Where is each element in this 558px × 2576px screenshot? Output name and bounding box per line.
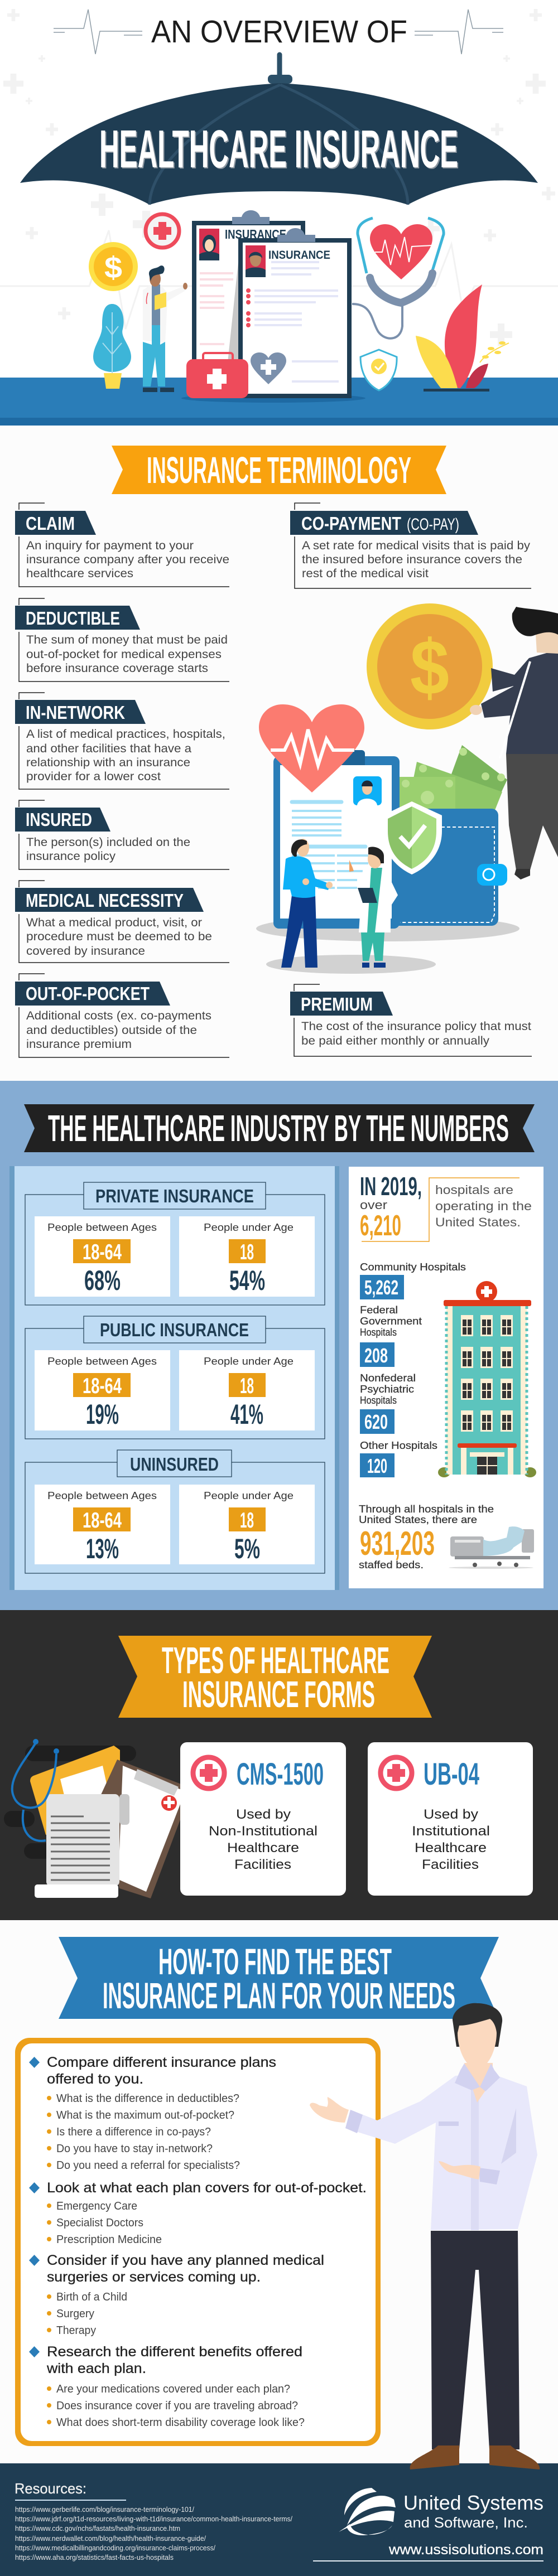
card: ub-04: UB-04 <box>424 1756 479 1791</box>
stat: nonfederal psychiatric hospitals <box>360 1372 416 1434</box>
group: public insurance: People under Age <box>204 1356 294 1367</box>
tip: compare plans: Is there a difference in co-pays? <box>56 2126 211 2138</box>
icon: coral heart <box>259 704 364 792</box>
shirt <box>345 2074 537 2230</box>
group: private insurance: PRIVATE INSURANCE <box>95 1186 254 1206</box>
stat: hospitals operating in 2019: United States. <box>435 1215 521 1229</box>
clipboard: front form <box>240 228 349 396</box>
group: uninsured: UNINSURED <box>130 1454 219 1475</box>
section: footer <box>0 2463 558 2576</box>
group: uninsured: 13% <box>86 1533 119 1564</box>
term: medical necessity: What a medical product, visit, or <box>26 916 202 929</box>
group: public insurance: 18-64 <box>83 1374 122 1398</box>
resources list: https://www.gerberlife.com/blog/insurance-terminology-101/ <box>15 2505 194 2514</box>
trousers <box>431 2231 519 2449</box>
stat: staffed beds: 931,203 <box>360 1525 435 1562</box>
stat: community hospitals: 5,262 <box>364 1276 398 1299</box>
group: private insurance: 68% <box>84 1265 121 1296</box>
term: premium: The cost of the insurance policy that must <box>301 1020 531 1033</box>
section: types of healthcare insurance forms <box>0 1610 558 1920</box>
term: medical necessity: procedure must be deemed to be <box>26 930 212 943</box>
icon: medical cross badge <box>146 214 179 248</box>
card: cms-1500: Non-Institutional <box>209 1824 318 1839</box>
term: out-of-pocket <box>15 974 229 1057</box>
stat: hospitals operating in 2019: IN 2019, <box>360 1172 422 1201</box>
ground band <box>0 378 558 426</box>
group: public insurance: People between Ages <box>47 1356 157 1367</box>
section: insurance terminology <box>15 446 558 1057</box>
card: cms-1500 <box>180 1742 346 1896</box>
tip: planned services: Therapy <box>56 2324 96 2337</box>
panel: insurance coverage <box>9 1166 339 1590</box>
section: header <box>0 0 558 427</box>
card: cms-1500: Healthcare <box>227 1840 299 1855</box>
tip: planned services: surgeries or services coming up. <box>47 2269 261 2285</box>
term: premium: PREMIUM <box>301 994 373 1014</box>
decorative heartbeat left <box>54 9 142 54</box>
stat: federal government hospitals: Government <box>360 1316 422 1327</box>
term: co-payment: the insured before insurance covers the <box>302 553 522 566</box>
group: uninsured <box>25 1450 325 1573</box>
tip: planned services: Consider if you have any planned medical <box>47 2253 324 2268</box>
website url: www.ussisolutions.com <box>388 2542 543 2558</box>
term: insured: INSURED <box>26 809 92 830</box>
stat: community hospitals: Community Hospitals <box>360 1262 466 1273</box>
tip: out-of-pocket coverage <box>29 2180 367 2246</box>
stat: nonfederal psychiatric hospitals: Hospitals <box>360 1395 397 1406</box>
group: private insurance <box>25 1182 325 1305</box>
group: public insurance: 19% <box>86 1399 119 1430</box>
panel: checklist <box>15 2038 381 2446</box>
term: co-payment: CO-PAYMENT <box>301 513 401 534</box>
term: medical necessity <box>15 881 229 963</box>
presenter figure <box>310 2003 540 2469</box>
stat: staffed beds: Through all hospitals in the <box>359 1504 494 1515</box>
card: cms-1500: Facilities <box>234 1857 291 1872</box>
tip: planned services: Surgery <box>56 2308 94 2320</box>
tip: research benefits <box>29 2344 305 2429</box>
term: in-network: A list of medical practices, hospitals, <box>26 728 225 741</box>
term: claim: CLAIM <box>26 513 75 534</box>
term: deductible: before insurance coverage starts <box>26 662 208 675</box>
stat: nonfederal psychiatric hospitals: Nonfederal <box>360 1372 416 1384</box>
stat: staffed beds: United States, there are <box>359 1514 477 1525</box>
stat: hospitals operating in 2019: hospitals are <box>435 1183 513 1197</box>
group: public insurance <box>25 1316 325 1439</box>
icon: green shield <box>383 801 442 874</box>
stat: nonfederal psychiatric hospitals: Psychiatric <box>360 1384 414 1395</box>
term: insured: The person(s) included on the <box>26 836 190 849</box>
tip: research benefits: with each plan. <box>46 2361 146 2376</box>
stat: nonfederal psychiatric hospitals: 620 <box>364 1410 388 1433</box>
icon: red and yellow plant <box>416 284 509 392</box>
tip: out-of-pocket coverage: Look at what each plan covers for out-of-pocket. <box>47 2180 367 2196</box>
card: ub-04 <box>368 1742 533 1896</box>
tip: planned services: Birth of a Child <box>56 2291 127 2303</box>
section: how to find the best insurance plan <box>15 1937 499 2446</box>
big dollar coin: $ <box>410 624 449 711</box>
patient figure <box>281 839 333 968</box>
logo: united systems and software <box>339 2488 543 2535</box>
logo: united systems and software: United Systems <box>403 2491 543 2514</box>
heading banner <box>118 1636 432 1718</box>
resources list <box>15 2480 292 2561</box>
stat: staffed beds <box>359 1504 494 1570</box>
card: ub-04: Healthcare <box>415 1840 487 1855</box>
tip: research benefits: Does insurance cover if you are traveling abroad? <box>56 2400 298 2412</box>
tip: compare plans: offered to you. <box>47 2071 143 2087</box>
wallet <box>391 809 507 926</box>
term: out-of-pocket: OUT-OF-POCKET <box>26 983 150 1004</box>
tip: out-of-pocket coverage: Emergency Care <box>56 2200 137 2212</box>
term: claim: insurance company after you receive <box>26 553 229 566</box>
money bills <box>400 745 507 820</box>
group: private insurance: People under Age <box>204 1222 294 1233</box>
icon: dollar coin: $ <box>104 251 122 284</box>
stat: other hospitals: Other Hospitals <box>360 1440 437 1451</box>
resources list: https://www.cdc.gov/nchs/fastats/health-insurance.htm <box>15 2524 180 2532</box>
tip: compare plans: Do you have to stay in-network? <box>56 2143 213 2155</box>
neck and collar <box>455 2063 500 2103</box>
stat: federal government hospitals: Hospitals <box>360 1327 397 1338</box>
illustration: medical paperwork <box>4 1739 190 1898</box>
tip: research benefits: Are your medications covered under each plan? <box>56 2383 290 2395</box>
logo: united systems and software: and Software, Inc. <box>404 2514 528 2531</box>
clipboard: back form: INSURANCE <box>225 227 286 241</box>
term: out-of-pocket: Additional costs (ex. co-payments <box>26 1009 211 1022</box>
icon: blue plant <box>93 304 131 389</box>
umbrella <box>20 55 538 205</box>
icon: red heart <box>370 224 432 279</box>
title: an overview of: AN OVERVIEW OF <box>151 14 407 50</box>
group: public insurance: 41% <box>230 1399 263 1430</box>
card: ub-04: Facilities <box>422 1857 479 1872</box>
resources list: https://www.jdrf.org/t1d-resources/living-with-t1d/insurance/common-health-insurance-terms/ <box>15 2515 292 2523</box>
stethoscope <box>352 218 444 339</box>
tip: planned services <box>29 2253 324 2337</box>
group: uninsured: People under Age <box>204 1490 294 1501</box>
term: co-payment: rest of the medical visit <box>302 567 429 580</box>
term: out-of-pocket: and deductibles) outside of the <box>26 1024 197 1037</box>
term: deductible: out-of-pocket for medical expenses <box>26 648 222 661</box>
icon: first aid kit <box>186 353 248 398</box>
group: public insurance: 18 <box>240 1374 254 1398</box>
doctor figure <box>349 847 398 968</box>
term: claim <box>15 503 229 587</box>
hands <box>310 2097 480 2179</box>
clipboard document <box>273 750 400 929</box>
term: claim: healthcare services <box>26 567 133 580</box>
icon: shield <box>360 350 397 390</box>
shirt details <box>345 2080 516 2230</box>
stat: federal government hospitals: 208 <box>364 1344 388 1367</box>
stat: federal government hospitals: Federal <box>360 1304 398 1316</box>
tip: research benefits: What does short-term disability coverage look like? <box>56 2416 305 2429</box>
term: deductible <box>15 598 229 682</box>
group: uninsured: 18-64 <box>83 1509 122 1533</box>
icon: dollar coin <box>89 242 138 291</box>
term: medical necessity: covered by insurance <box>26 945 145 958</box>
stat: hospitals operating in 2019: over <box>360 1198 387 1212</box>
heading banner <box>59 1937 499 2019</box>
card: ub-04: Used by <box>424 1807 478 1822</box>
doctor figure <box>143 265 187 392</box>
term: medical necessity: MEDICAL NECESSITY <box>26 890 184 911</box>
heading banner: INSURANCE FORMS <box>182 1674 375 1715</box>
decorative heartbeat right <box>415 9 503 54</box>
stat: hospitals operating in 2019 <box>360 1172 532 1242</box>
term: in-network <box>15 693 229 789</box>
group: public insurance: PUBLIC INSURANCE <box>100 1320 249 1340</box>
term: premium <box>290 984 532 1056</box>
big dollar coin <box>367 603 493 729</box>
businessman <box>470 607 558 879</box>
clipboard: back form <box>194 210 303 363</box>
group: uninsured: 5% <box>234 1533 260 1564</box>
term: premium: be paid either monthly or annually <box>301 1035 490 1047</box>
term: co-payment: A set rate for medical visits that is paid by <box>302 539 531 552</box>
group: private insurance: People between Ages <box>47 1222 157 1233</box>
tip: out-of-pocket coverage: Specialist Doctors <box>56 2217 143 2229</box>
stat: hospitals operating in 2019: 6,210 <box>360 1210 401 1242</box>
term: co-payment: (CO-PAY) <box>407 515 459 534</box>
card: cms-1500: Used by <box>236 1807 291 1822</box>
stat: staffed beds: staffed beds. <box>359 1559 424 1570</box>
head <box>453 2003 502 2068</box>
group: uninsured: 18 <box>240 1509 254 1533</box>
stat: hospitals operating in 2019: operating in the <box>435 1199 532 1213</box>
resources list: https://www.medicalbillingandcoding.org/insurance-claims-process/ <box>15 2544 215 2552</box>
card: cms-1500: CMS-1500 <box>237 1756 324 1791</box>
tip: compare plans: What is the difference in deductibles? <box>56 2092 239 2105</box>
group: private insurance: 18 <box>240 1240 254 1264</box>
heading banner <box>112 446 446 494</box>
tip: compare plans: What is the maximum out-of-pocket? <box>56 2109 234 2121</box>
tip: compare plans: Do you need a referral for specialists? <box>56 2159 240 2172</box>
term: in-network: provider for a lower cost <box>26 770 161 783</box>
resources list: https://www.aha.org/statistics/fast-facts-us-hospitals <box>15 2553 174 2561</box>
group: private insurance: 54% <box>229 1265 265 1296</box>
card: ub-04: Institutional <box>412 1824 490 1839</box>
resources list: Resources: <box>15 2480 86 2497</box>
term: deductible: DEDUCTIBLE <box>26 608 120 629</box>
term: in-network: relationship with an insurance <box>26 756 190 769</box>
stat: community hospitals <box>360 1262 466 1299</box>
stat: other hospitals <box>360 1440 437 1477</box>
clipboard: front form: INSURANCE <box>268 249 330 262</box>
illustration: coin, heart, wallet and people <box>256 603 558 974</box>
stat: federal government hospitals <box>360 1304 422 1367</box>
term: out-of-pocket: insurance premium <box>26 1038 132 1051</box>
term: claim: An inquiry for payment to your <box>26 539 194 552</box>
term: in-network: IN-NETWORK <box>26 702 125 723</box>
panel: hospitals <box>349 1167 543 1588</box>
section: healthcare industry by the numbers <box>0 1081 558 1610</box>
group: uninsured: People between Ages <box>47 1490 157 1501</box>
tip: compare plans: Compare different insurance plans <box>47 2055 276 2070</box>
icon: hospital bed <box>449 1526 534 1569</box>
term: in-network: and other facilities that have a <box>26 742 191 755</box>
term: deductible: The sum of money that must be paid <box>26 634 228 646</box>
term: insured: insurance policy <box>26 850 116 863</box>
term: co-payment <box>290 503 531 588</box>
tip: compare plans <box>29 2055 276 2172</box>
icon: hospital building <box>438 1281 536 1477</box>
background crosses <box>0 9 558 346</box>
tip: research benefits: Research the different benefits offered <box>47 2344 302 2360</box>
tip: out-of-pocket coverage: Prescription Medicine <box>56 2234 162 2246</box>
group: private insurance: 18-64 <box>83 1240 122 1264</box>
stat: other hospitals: 120 <box>367 1454 387 1477</box>
term: insured <box>15 800 229 869</box>
shoes <box>410 2445 540 2469</box>
resources list: https://www.nerdwallet.com/blog/health/health-insurance-guide/ <box>15 2534 206 2543</box>
